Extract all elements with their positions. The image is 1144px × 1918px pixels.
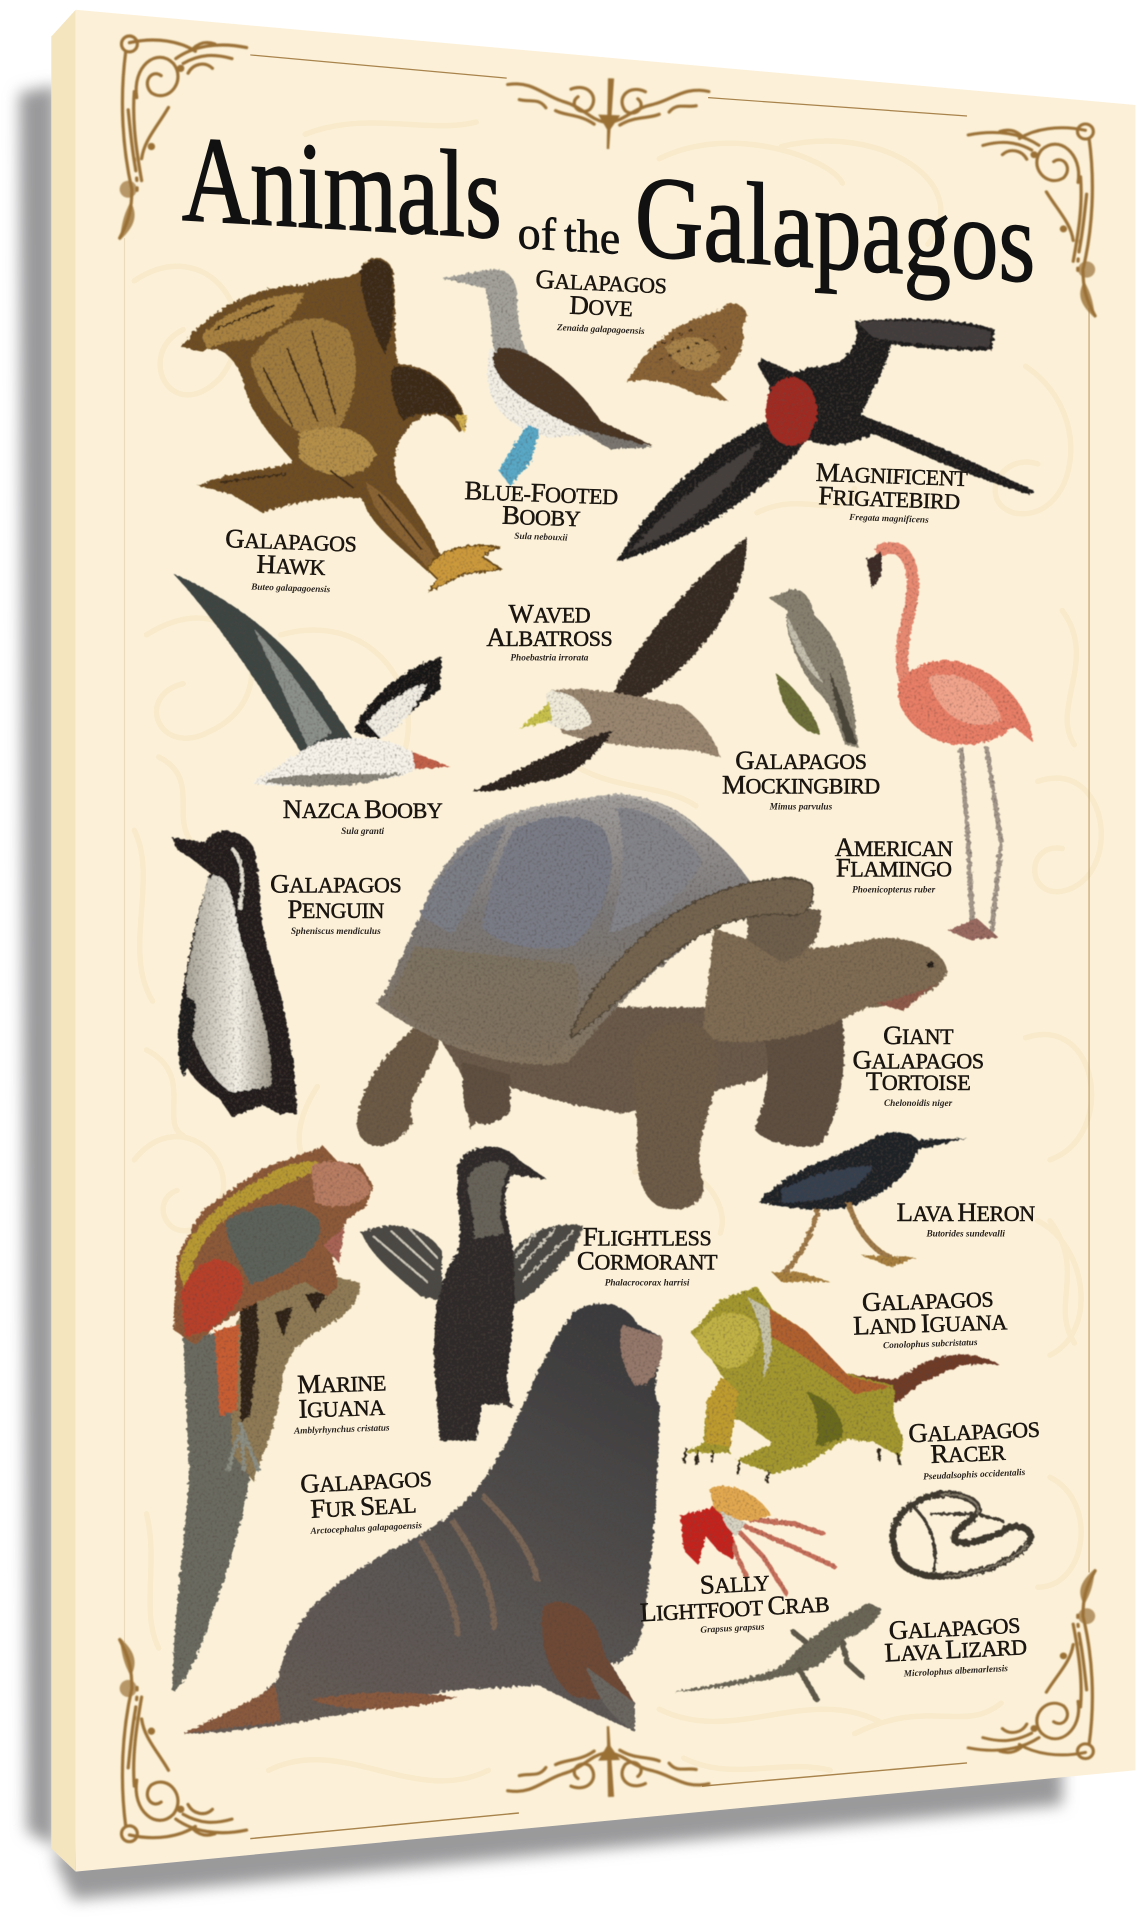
label: flightless cormorant xyxy=(577,1221,718,1289)
label: American flamingo xyxy=(835,832,953,895)
label: Galapagos hawk xyxy=(225,523,357,595)
label: Nazca booby xyxy=(283,794,443,837)
label: Nazca booby: Sula granti xyxy=(341,827,385,837)
label: giant Galapagos tortoise xyxy=(852,1020,984,1109)
label: Sally Lightfoot crab: SALLY xyxy=(699,1566,771,1600)
label: magnificent frigatebird xyxy=(815,457,969,526)
animal: marine iguana on rock xyxy=(172,1146,374,1691)
label: marine iguana xyxy=(293,1366,390,1437)
animal: Galapagos lava lizard xyxy=(674,1603,882,1699)
animal: giant Galapagos tortoise xyxy=(357,794,947,1209)
decorative border lines xyxy=(125,55,1089,1839)
label: Galapagos fur seal: Arctocephalus galapagoensis xyxy=(309,1521,422,1537)
label: Galapagos lava lizard: LAVA LIZARD xyxy=(884,1630,1027,1668)
label: marine iguana: IGUANA xyxy=(298,1391,386,1424)
label: American flamingo: FLAMINGO xyxy=(836,853,952,883)
label: Galapagos penguin: Spheniscus mendiculus xyxy=(291,927,381,937)
ornament: top left corner xyxy=(120,36,247,241)
label: Sally Lightfoot crab xyxy=(639,1566,830,1636)
animal: Galapagos racer snake xyxy=(893,1494,1030,1576)
label: Galapagos penguin: GALAPAGOS xyxy=(270,868,401,898)
label: Galapagos racer: RACER xyxy=(930,1436,1006,1469)
label: Galapagos racer: Pseudalsophis occidentalis xyxy=(923,1468,1026,1482)
label: magnificent frigatebird: MAGNIFICENT xyxy=(815,457,969,492)
label: Galapagos land iguana: GALAPAGOS xyxy=(861,1283,994,1317)
label: Galapagos mockingbird xyxy=(722,745,880,812)
label: lava heron xyxy=(897,1197,1035,1240)
label: marine iguana: Amblyrhynchus cristatus xyxy=(293,1423,390,1437)
animal: Galapagos hawk xyxy=(181,258,501,591)
label: flightless cormorant: Phalacrocorax harrisi xyxy=(605,1279,690,1289)
label: giant Galapagos tortoise: TORTOISE xyxy=(866,1066,970,1096)
label: lava heron: LAVA HERON xyxy=(897,1197,1035,1227)
label: Galapagos lava lizard xyxy=(884,1609,1027,1680)
label: Galapagos lava lizard: GALAPAGOS xyxy=(888,1609,1021,1645)
label: Galapagos dove xyxy=(535,264,667,337)
label: magnificent frigatebird: Fregata magnificens xyxy=(848,513,929,526)
label: waved albatross: Phoebastria irrorata xyxy=(510,653,589,663)
label: Galapagos mockingbird: GALAPAGOS xyxy=(735,745,867,775)
label: Galapagos mockingbird: MOCKINGBIRD xyxy=(722,770,880,800)
animal: flightless cormorant xyxy=(361,1146,584,1441)
label: Galapagos racer xyxy=(908,1413,1040,1482)
label: lava heron: Butorides sundevalli xyxy=(925,1230,1005,1240)
label: Galapagos hawk: GALAPAGOS xyxy=(225,523,357,558)
label: Galapagos land iguana: LAND IGUANA xyxy=(853,1305,1008,1341)
animal: Sally Lightfoot crab xyxy=(680,1486,834,1593)
ornament: top right corner xyxy=(968,124,1095,318)
title: Galapagos xyxy=(635,151,1035,308)
label: Sally Lightfoot crab: LIGHTFOOT CRAB xyxy=(639,1588,830,1627)
animal: Galapagos penguin xyxy=(172,831,297,1117)
label: Galapagos land iguana: Conolophus subcristatus xyxy=(883,1338,978,1351)
animal: Galapagos fur seal xyxy=(183,1304,662,1734)
animal: Nazca booby xyxy=(173,574,451,786)
label: flightless cormorant: FLIGHTLESS xyxy=(583,1221,711,1251)
label: American flamingo: AMERICAN xyxy=(835,832,953,862)
animal: waved albatross xyxy=(472,537,747,792)
label: blue-footed booby xyxy=(464,475,618,544)
label: Galapagos fur seal xyxy=(299,1462,432,1537)
label: giant Galapagos tortoise: GIANT xyxy=(883,1020,954,1050)
title: Animals xyxy=(182,110,502,265)
label: blue-footed booby: Sula nebouxii xyxy=(514,532,568,544)
label: blue-footed booby: BLUE-FOOTED xyxy=(464,475,618,510)
label: Galapagos dove: DOVE xyxy=(569,290,633,322)
title xyxy=(182,110,1035,308)
animal: American flamingo xyxy=(867,548,1033,940)
label: Sally Lightfoot crab: Grapsus grapsus xyxy=(700,1622,765,1636)
title: of the xyxy=(518,208,620,265)
ornament: top centre xyxy=(505,75,709,153)
label: Galapagos fur seal: GALAPAGOS xyxy=(299,1462,432,1499)
label: Nazca booby: NAZCA BOOBY xyxy=(283,794,443,824)
label: Galapagos hawk: HAWK xyxy=(256,549,326,581)
label: marine iguana: MARINE xyxy=(297,1366,386,1399)
label: Galapagos dove: Zenaida galapagoensis xyxy=(556,323,645,337)
label: Galapagos dove: GALAPAGOS xyxy=(535,264,667,299)
label: Galapagos fur seal: FUR SEAL xyxy=(310,1488,417,1524)
animal: blue-footed booby xyxy=(442,269,653,486)
label: giant Galapagos tortoise: GALAPAGOS xyxy=(852,1044,984,1074)
animal: Galapagos mockingbird xyxy=(769,588,858,747)
label: Galapagos mockingbird: Mimus parvulus xyxy=(769,802,833,812)
label: Galapagos racer: GALAPAGOS xyxy=(908,1413,1040,1448)
ornament: bottom centre xyxy=(505,1723,709,1801)
ornament: bottom left corner xyxy=(120,1637,247,1842)
animal: Galapagos dove xyxy=(626,303,747,402)
label: Galapagos penguin xyxy=(270,868,401,937)
label: blue-footed booby: BOOBY xyxy=(502,500,581,532)
animal: magnificent frigatebird xyxy=(617,319,1034,562)
label: American flamingo: Phoenicopterus ruber xyxy=(852,885,936,895)
label: Galapagos lava lizard: Microlophus albemarlensis xyxy=(903,1664,1009,1680)
label: magnificent frigatebird: FRIGATEBIRD xyxy=(818,480,960,515)
label: waved albatross xyxy=(486,599,612,663)
label: giant Galapagos tortoise: Chelonoidis niger xyxy=(884,1099,953,1109)
label: Galapagos hawk: Buteo galapagoensis xyxy=(250,582,331,595)
label: flightless cormorant: CORMORANT xyxy=(577,1246,718,1276)
label: waved albatross: WAVED xyxy=(509,599,590,629)
label: Galapagos penguin: PENGUIN xyxy=(287,894,385,924)
ornament: bottom right corner xyxy=(968,1568,1095,1759)
label: Galapagos land iguana xyxy=(853,1283,1008,1351)
label: waved albatross: ALBATROSS xyxy=(486,622,612,652)
animal: lava heron xyxy=(759,1132,967,1282)
animal: Galapagos land iguana xyxy=(684,1287,1000,1482)
